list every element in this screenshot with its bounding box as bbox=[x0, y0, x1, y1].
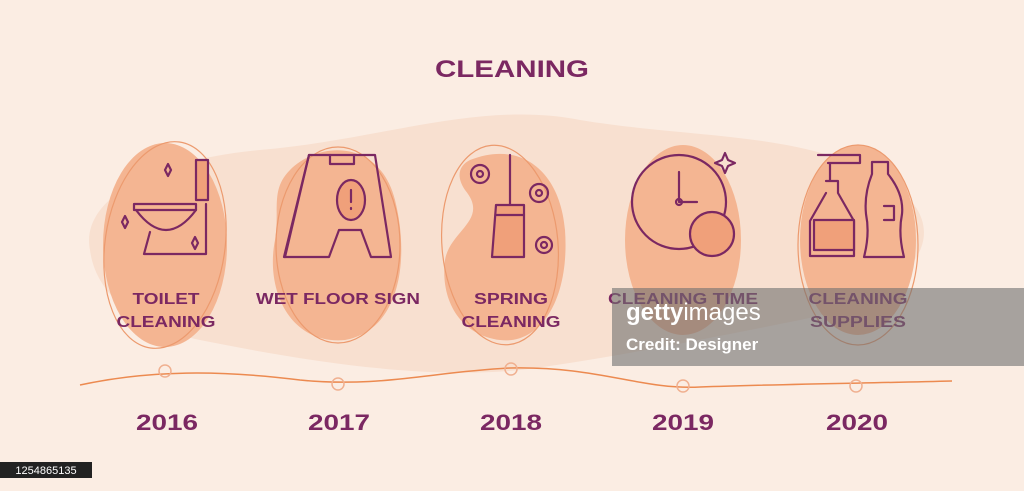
background blob bbox=[89, 114, 924, 373]
panel: cleaning supplies bbox=[798, 145, 918, 345]
label bbox=[462, 291, 560, 331]
panel: spring cleaning bbox=[434, 140, 566, 350]
label: CLEANING bbox=[462, 314, 560, 331]
label: SPRING bbox=[474, 291, 548, 308]
timeline line bbox=[80, 363, 952, 392]
icon: bottles bbox=[810, 155, 904, 257]
watermark bbox=[612, 288, 1024, 366]
label: CLEANING TIME bbox=[608, 291, 758, 308]
image id bbox=[0, 462, 92, 478]
panel: wet floor sign bbox=[256, 147, 420, 343]
panel: toilet cleaning bbox=[91, 134, 239, 356]
year labels bbox=[136, 410, 888, 435]
year labels: 2016 bbox=[136, 410, 198, 435]
icon: clock bbox=[632, 153, 735, 256]
label: WET FLOOR SIGN bbox=[256, 291, 420, 308]
year labels: 2019 bbox=[652, 410, 714, 435]
label bbox=[808, 291, 908, 331]
watermark: gettyimages bbox=[626, 299, 761, 326]
title: CLEANING bbox=[435, 56, 589, 83]
year labels: 2020 bbox=[826, 410, 888, 435]
icon: toilet bbox=[122, 160, 208, 254]
icon: broom and flowers bbox=[471, 155, 552, 257]
label: TOILET bbox=[132, 291, 200, 308]
year labels: 2017 bbox=[308, 410, 370, 435]
watermark: Credit: Designer bbox=[626, 335, 759, 354]
icon: wet floor sign bbox=[284, 155, 391, 257]
image id: 1254865135 bbox=[15, 465, 77, 477]
label: SUPPLIES bbox=[810, 314, 906, 331]
year labels: 2018 bbox=[480, 410, 542, 435]
label: CLEANING bbox=[808, 291, 908, 308]
panel: cleaning time bbox=[608, 145, 758, 335]
label: CLEANING bbox=[116, 314, 216, 331]
label bbox=[116, 291, 216, 331]
